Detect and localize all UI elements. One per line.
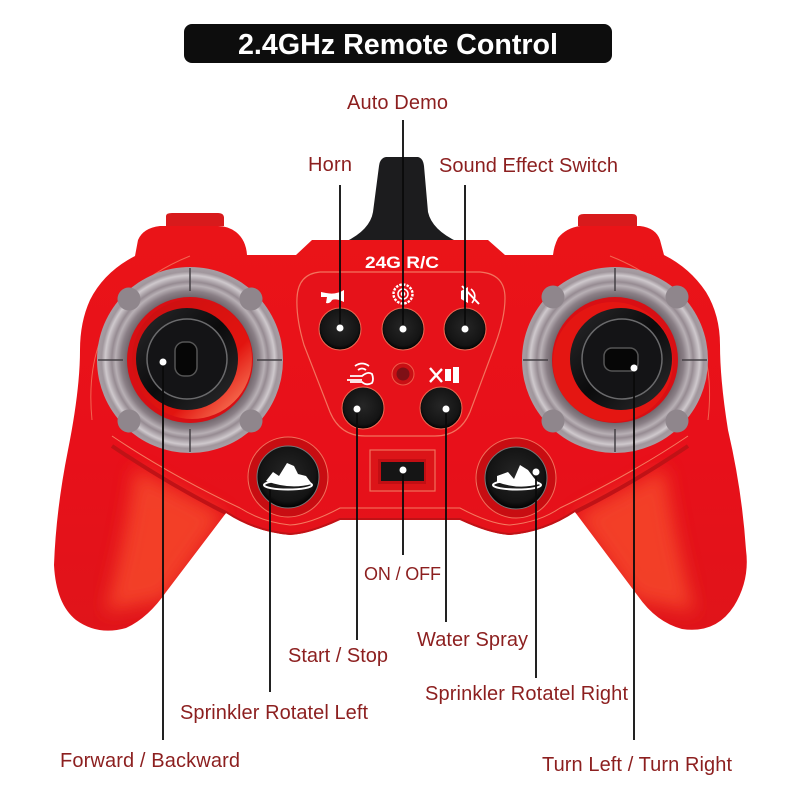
leader dots (160, 324, 638, 476)
controller body (54, 226, 747, 631)
right turret knob (476, 438, 556, 518)
label: auto demo: Auto Demo (347, 92, 448, 114)
round buttons (319, 308, 486, 429)
indicator light (392, 363, 414, 385)
label: horn: Horn (308, 154, 352, 176)
icon: spray (430, 367, 459, 383)
label: sprinkler right: Sprinkler Rotatel Right (425, 683, 628, 705)
icon: sound off (461, 286, 479, 304)
body highlights (91, 256, 710, 612)
shoulder buttons (166, 213, 637, 226)
icon: sound emblem (394, 284, 412, 304)
right joystick (522, 267, 708, 453)
remote controller (54, 157, 747, 631)
model label: 24G R/C (365, 253, 439, 272)
label: start stop: Start / Stop (288, 645, 388, 667)
panel icons (321, 284, 479, 384)
label: forward backward: Forward / Backward (60, 750, 240, 772)
leader lines (163, 120, 634, 740)
left joystick (97, 267, 283, 453)
left turret knob (248, 437, 328, 517)
title: 2.4GHz Remote Control (238, 29, 558, 61)
title (184, 24, 612, 63)
icon: key fob (347, 364, 373, 384)
antenna (345, 157, 458, 242)
center panel (297, 272, 505, 436)
label: turn left right: Turn Left / Turn Right (542, 754, 732, 776)
label: sound effect switch: Sound Effect Switch (439, 155, 618, 177)
icon: horn (321, 290, 344, 303)
label: on off: ON / OFF (364, 564, 441, 584)
label: water spray: Water Spray (417, 629, 528, 651)
label: sprinkler left: Sprinkler Rotatel Left (180, 702, 368, 724)
power switch (370, 450, 435, 491)
